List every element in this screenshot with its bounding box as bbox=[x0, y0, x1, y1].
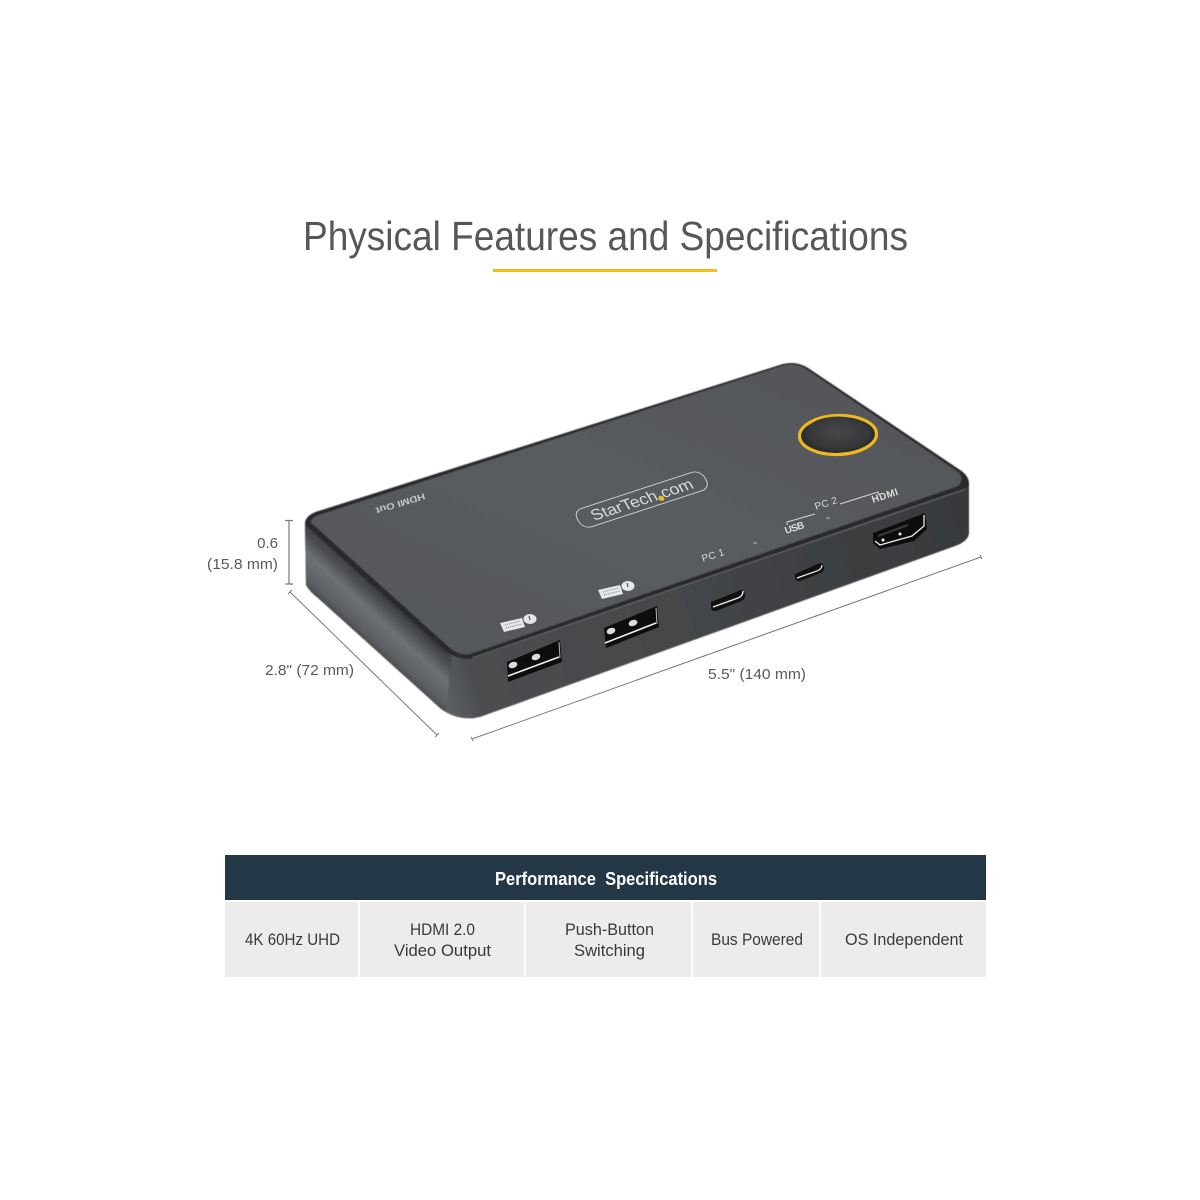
cell: HDMI 2.0 Video Output: Video Output bbox=[394, 941, 491, 960]
depth dimension line bbox=[288, 590, 439, 737]
logo: StarTech.com bbox=[587, 476, 697, 524]
cell: Push-Button Switching: Switching bbox=[574, 941, 645, 960]
depth label: 2.8" (72 mm) bbox=[265, 662, 354, 679]
height dimension line bbox=[285, 520, 293, 584]
title underline bbox=[493, 269, 717, 272]
cell: 4K 60Hz UHD bbox=[225, 902, 358, 977]
cell: Push-Button Switching bbox=[526, 902, 692, 977]
cell: Bus Powered bbox=[693, 902, 820, 977]
width dimension line bbox=[471, 555, 982, 741]
table header bbox=[225, 855, 986, 900]
cell: OS Independent: OS Independent bbox=[845, 930, 963, 949]
cell: OS Independent bbox=[821, 902, 986, 977]
label: PC 2: PC 2 bbox=[814, 495, 839, 513]
product photo: KVM switch bbox=[305, 363, 969, 718]
height label bbox=[207, 535, 278, 573]
cell: Push-Button Switching: Push-Button bbox=[565, 920, 654, 939]
device body bbox=[305, 363, 969, 718]
HDMI port bbox=[873, 513, 927, 549]
cell: HDMI 2.0 Video Output: HDMI 2.0 bbox=[410, 920, 475, 939]
cell: 4K 60Hz UHD: 4K 60Hz UHD bbox=[245, 930, 340, 949]
USB-A port 2 bbox=[604, 606, 659, 648]
label: HDMI: HDMI bbox=[871, 487, 900, 506]
icon: keyboard and mouse 2 bbox=[598, 581, 634, 599]
panel: performance specifications bbox=[225, 855, 986, 977]
height label: 0.6 bbox=[257, 535, 278, 552]
USB-A port 1 bbox=[507, 640, 562, 682]
button bbox=[799, 414, 877, 456]
cell: HDMI 2.0 Video Output bbox=[360, 902, 524, 977]
table header: Performance Specifications bbox=[495, 869, 717, 889]
USB-C port 1 bbox=[711, 590, 745, 611]
label: USB: USB bbox=[784, 520, 806, 537]
status LEDs bbox=[753, 517, 830, 544]
height label: (15.8 mm) bbox=[207, 556, 278, 573]
icon: keyboard and mouse 1 bbox=[500, 614, 536, 632]
width label: 5.5" (140 mm) bbox=[708, 666, 806, 683]
label: HDMI Out: HDMI Out bbox=[375, 491, 426, 516]
USB-C port 2 bbox=[795, 563, 824, 581]
PC 2 bracket bbox=[787, 492, 879, 525]
cell: Bus Powered: Bus Powered bbox=[711, 930, 803, 949]
label: PC 1: PC 1 bbox=[701, 547, 726, 565]
title: Physical Features and Specifications bbox=[303, 213, 908, 259]
logo bbox=[573, 470, 711, 529]
